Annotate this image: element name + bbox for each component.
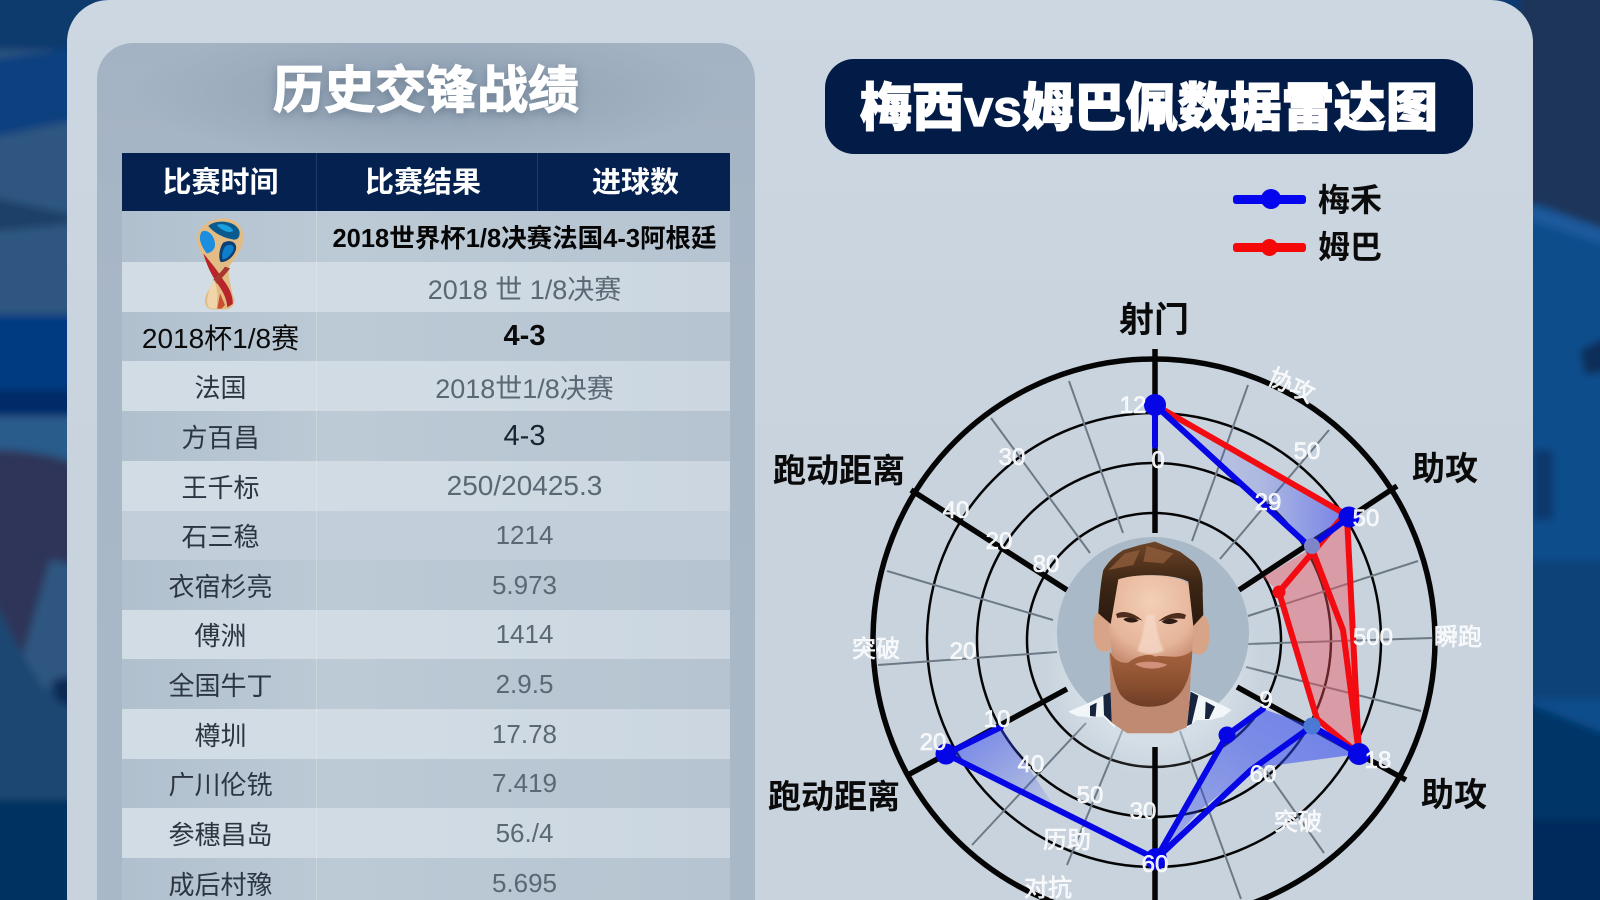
row 9: 1414 (496, 619, 553, 649)
scale labels: 50 (1353, 505, 1379, 532)
scale labels: 瞬跑 (1434, 624, 1482, 651)
table header: 比赛时间 (162, 167, 278, 199)
row 2 (122, 262, 730, 312)
row 2: 2018 世 1/8决赛 (428, 274, 621, 304)
heading: radar chart title (825, 59, 1473, 154)
row 3 (122, 312, 730, 361)
scale labels: 18 (1365, 747, 1391, 774)
row 8 (122, 560, 730, 610)
scale labels: 500 (1353, 624, 1393, 651)
row 7 (122, 511, 730, 560)
scale labels: 0 (1151, 447, 1165, 474)
scale labels: 突破 (852, 636, 900, 663)
row 9 (122, 610, 730, 659)
row 6: 250/20425.3 (447, 470, 602, 501)
row 12: 7.419 (492, 768, 557, 798)
scale labels: 协攻 (1264, 364, 1319, 409)
heading: radar chart title: 梅西vs姆巴佩数据雷达图 (860, 80, 1438, 138)
legend: Messi: 梅禾 (1318, 182, 1382, 218)
row 9: 傅洲 (194, 621, 246, 651)
row 8: 衣宿杉亮 (168, 572, 272, 602)
scale labels: 10 (984, 706, 1010, 733)
scale labels: 29 (1255, 489, 1281, 516)
axis label: assists upper: 助攻 (1412, 450, 1478, 487)
scale labels: 40 (943, 497, 969, 524)
row 5 (122, 411, 730, 461)
scale labels: 30 (999, 444, 1025, 471)
table: match records (122, 153, 730, 900)
data points (936, 394, 1370, 870)
heading: history record: 历史交锋战绩 (273, 62, 579, 119)
glow below portrait (1045, 560, 1261, 776)
axis label: assists lower: 助攻 (1421, 776, 1487, 813)
row 14 (122, 858, 730, 900)
row 6 (122, 461, 730, 511)
row 4: 2018世1/8决赛 (435, 374, 614, 404)
panel: history table background (97, 43, 755, 900)
row 14: 成后村豫 (168, 870, 272, 900)
row 13: 参穗昌岛 (168, 820, 272, 850)
series: messi lower fill (1156, 709, 1359, 859)
legend: Mbappe: 姆巴 (1318, 229, 1382, 265)
series: messi lines (946, 405, 1359, 859)
scale labels: 80 (1033, 551, 1059, 578)
scale labels: 20 (920, 729, 946, 756)
grid: thin spokes (878, 381, 1432, 899)
row 1: 2018世界杯1/8决赛法国4-3阿根廷 (332, 225, 717, 253)
row 11: 17.78 (492, 718, 557, 748)
row 13 (122, 808, 730, 858)
row 14: 5.695 (492, 868, 557, 898)
table header: 进球数 (592, 167, 679, 199)
row 4 (122, 361, 730, 411)
series: messi left fill (946, 727, 1060, 815)
scale labels: 12 (1120, 392, 1146, 419)
scale labels: 20 (950, 638, 976, 665)
scale labels: 50 (1294, 438, 1320, 465)
row 12 (122, 759, 730, 808)
axis label: running distance upper: 跑动距离 (773, 452, 905, 489)
row 1 (122, 211, 730, 262)
row 13: 56./4 (496, 818, 553, 848)
scale labels: 9 (1259, 687, 1273, 714)
scale labels: 50 (1077, 782, 1103, 809)
axis label: running distance lower: 跑动距离 (768, 778, 900, 815)
scale labels: 40 (1018, 751, 1044, 778)
row 5: 方百昌 (181, 422, 260, 452)
legend: Mbappe (1233, 229, 1382, 265)
table header: 比赛结果 (365, 167, 481, 199)
row 11: 樽圳 (194, 720, 246, 750)
scale labels: 60 (1142, 851, 1168, 878)
row 5: 4-3 (504, 420, 545, 452)
row 10: 2.9.5 (496, 668, 553, 698)
scale labels: 历助 (1043, 827, 1091, 854)
grid: rings (873, 359, 1435, 900)
row 4: 法国 (194, 372, 246, 402)
scale labels: 60 (1250, 761, 1276, 788)
row 6: 王千标 (181, 472, 260, 502)
legend: Messi (1233, 182, 1382, 218)
row 12: 广川伦铣 (168, 770, 272, 800)
photo: player portrait (1057, 537, 1249, 733)
row 3: 2018杯1/8赛 (142, 322, 299, 354)
row 7: 1214 (496, 520, 553, 550)
series: messi upper fill (1155, 405, 1349, 547)
row 10 (122, 659, 730, 709)
scale labels: 30 (1130, 798, 1156, 825)
scale labels: 20 (986, 528, 1012, 555)
legend: players (1233, 182, 1382, 265)
row 3: 4-3 (504, 320, 545, 352)
row 7: 石三稳 (181, 522, 260, 552)
row 8: 5.973 (492, 570, 557, 600)
series: mbappe fill (1263, 517, 1359, 754)
table header (122, 153, 730, 211)
scale labels: 突破 (1274, 809, 1322, 836)
scale labels (852, 364, 1482, 900)
series: mbappe lines (1155, 405, 1359, 754)
grid: thick spokes (906, 349, 1406, 900)
axis label: shots: 射门 (1119, 301, 1189, 340)
row 10: 全国牛丁 (168, 670, 272, 700)
row 11 (122, 709, 730, 759)
